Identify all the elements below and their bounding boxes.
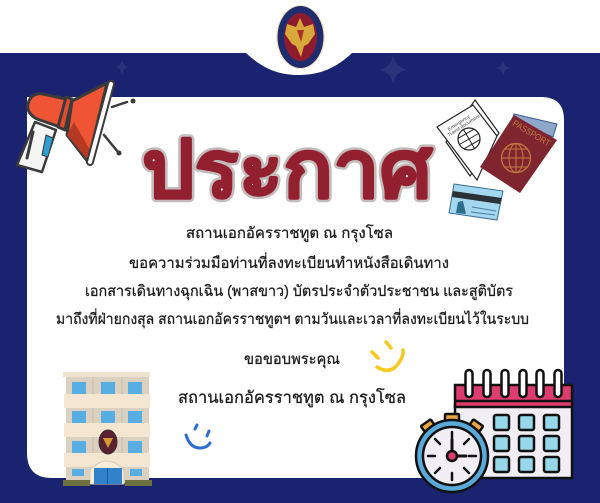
- white header notch: [246, 53, 352, 75]
- icon: calendar: [455, 370, 572, 478]
- body text: มาถึงที่ฝ่ายกงสุล สถานเอกอัครราชทูตฯ ตามวันและเวลาที่ลงทะเบียนไว้ในระบบ: [56, 308, 529, 329]
- body text: [56, 224, 529, 408]
- title: ประกาศ: [142, 125, 433, 214]
- body text: สถานเอกอัครราชทูต ณ กรุงโซล: [178, 388, 406, 408]
- icon: megaphone: [17, 83, 136, 172]
- icon: emergency travel document: Emergency: [447, 114, 472, 133]
- body text: ขอความร่วมมือท่านที่ลงทะเบียนทำหนังสือเดินทาง: [129, 252, 449, 272]
- icon: yellow smiley: [372, 342, 403, 370]
- icon: passport: PASSPORT: [511, 118, 552, 149]
- icon: stopwatch: [416, 414, 488, 492]
- embassy emblem: [276, 5, 325, 69]
- icon: embassy building: [63, 372, 152, 486]
- body text: สถานเอกอัครราชทูต ณ กรุงโซล: [186, 224, 393, 243]
- title: ประกาศ: [142, 125, 433, 214]
- white content card: [27, 97, 564, 478]
- sparkle stars: [115, 55, 510, 84]
- body text: เอกสารเดินทางฉุกเฉิน (พาสขาว) บัตรประจำตัวประชาชน และสูติบัตร: [85, 283, 513, 301]
- body text: ขอขอบพระคุณ: [244, 351, 340, 369]
- icon: ID card: [449, 184, 503, 220]
- icon: emergency travel document: [437, 100, 499, 180]
- icon: blue smiley: [186, 425, 210, 448]
- icon: passport: [480, 114, 557, 193]
- icon: emergency travel document: Travel document: [447, 113, 482, 139]
